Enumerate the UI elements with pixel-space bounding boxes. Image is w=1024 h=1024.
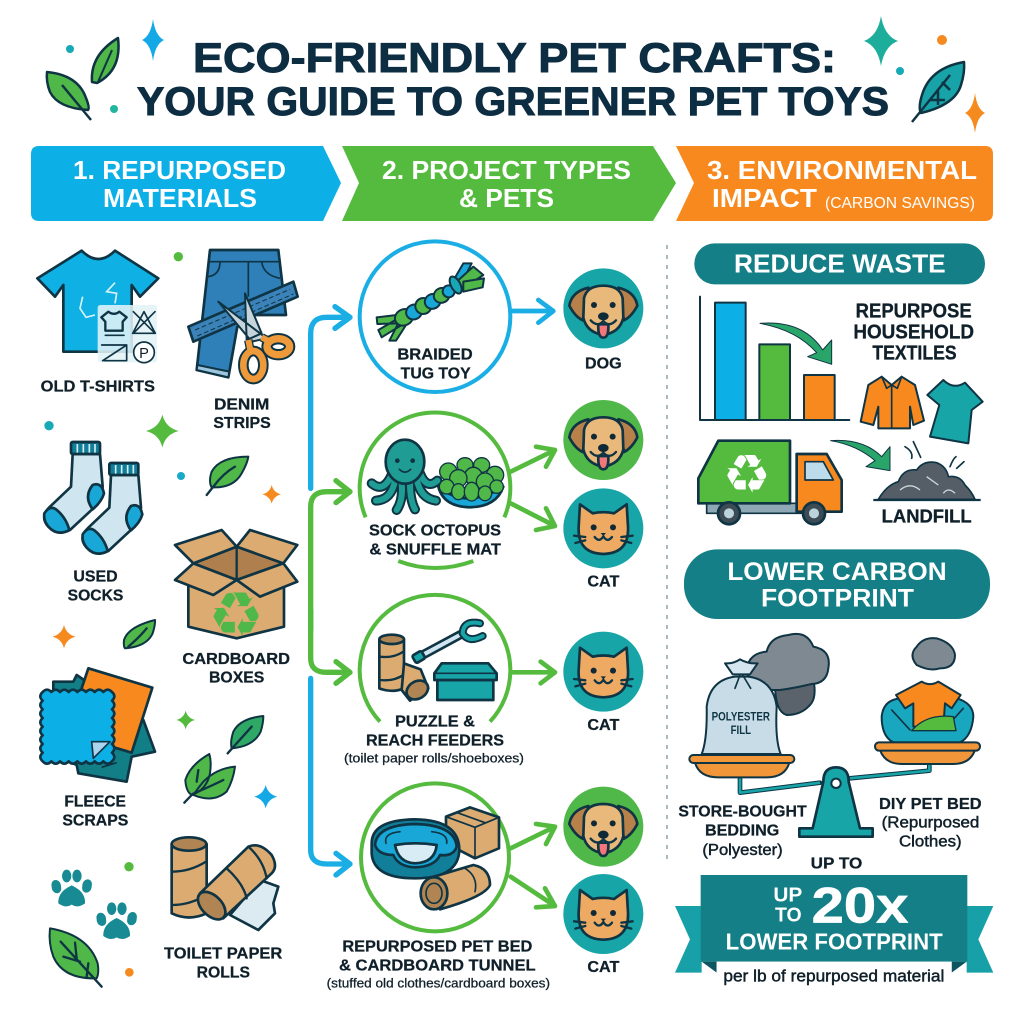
- icon: used socks: [44, 442, 142, 554]
- panel: braided tug toy: [360, 241, 510, 392]
- ribbon: 20x lower footprint: LOWER FOOTPRINT: [726, 928, 943, 954]
- label: repurpose household textiles: HOUSEHOLD: [853, 320, 974, 343]
- decorations: upper column 1: [44, 252, 281, 504]
- icon: old t-shirt: P: [139, 346, 149, 362]
- label: cardboard boxes: BOXES: [209, 669, 265, 686]
- label: repurpose household textiles: [853, 299, 974, 364]
- label: toilet paper rolls: [164, 946, 283, 981]
- icon: polyester fill bag on pan: FILL: [731, 723, 751, 737]
- banner 1: repurposed materials: 1. REPURPOSED: [73, 155, 286, 185]
- label: repurposed pet bed and cardboard tunnel: [327, 939, 550, 990]
- label: repurposed pet bed and cardboard tunnel: & CARDBOARD TUNNEL: [339, 958, 536, 975]
- heading: lower carbon footprint: [684, 549, 990, 619]
- icon: cat on teal: [563, 488, 643, 568]
- panel: sock octopus and snuffle mat: & SNUFFLE MAT: [369, 541, 501, 558]
- icon: cardboard box: ♻: [208, 579, 264, 651]
- icon: toilet paper rolls: [172, 837, 278, 930]
- ribbon: 20x lower footprint: 20x: [812, 878, 909, 934]
- label: repurposed pet bed and cardboard tunnel: (stuffed old clothes/cardboard boxes): [327, 976, 550, 990]
- panel: puzzle and reach feeders: (toilet paper rolls/shoeboxes): [344, 751, 524, 765]
- banner 3: environmental impact: (CARBON SAVINGS): [825, 195, 975, 212]
- icon: polyester fill bag on pan: POLYESTER: [712, 710, 770, 724]
- column 2: project types, upper: [311, 241, 643, 630]
- label: up to: UP TO: [811, 855, 862, 872]
- icon: old t-shirt: [37, 251, 158, 363]
- label: landfill: LANDFILL: [882, 506, 972, 527]
- icon: orange jacket: [861, 377, 924, 428]
- label: cat: CAT: [587, 717, 620, 734]
- ribbon: 20x lower footprint: [675, 875, 993, 987]
- icon: polyester cloud: [747, 634, 829, 715]
- label: diy pet bed: (Repurposed: [882, 815, 979, 832]
- label: repurpose household textiles: TEXTILES: [872, 341, 957, 364]
- icon: teal shirt: [927, 380, 983, 443]
- arrow: braided toy to dog: [513, 300, 553, 323]
- panel: braided tug toy: TUG TOY: [401, 365, 471, 382]
- icon: dog on teal: [563, 268, 643, 348]
- icon: cat on teal: [563, 874, 643, 954]
- arrow: blue flow to pet bed: [311, 678, 350, 875]
- ribbon: 20x lower footprint: UP: [773, 885, 802, 907]
- label: cardboard boxes: CARDBOARD: [182, 651, 290, 668]
- section: lower carbon footprint: [675, 549, 993, 987]
- icon: dog on green: [563, 787, 643, 867]
- label: fleece scraps: [62, 794, 129, 830]
- label: dog: DOG: [585, 355, 622, 372]
- banner 2: project types and pets: [342, 146, 676, 221]
- column 1: materials, upper: [37, 250, 298, 651]
- label: denim strips: [213, 396, 271, 432]
- column 1: materials, lower: [40, 620, 290, 987]
- label: store-bought bedding: STORE-BOUGHT: [678, 804, 807, 821]
- label: diy pet bed: [879, 796, 982, 851]
- label: toilet paper rolls: TOILET PAPER: [164, 946, 283, 963]
- arrow: octopus to dog: [511, 447, 555, 472]
- icon: balance scale: [740, 765, 929, 837]
- label: denim strips: DENIM: [214, 396, 269, 413]
- icon: recycling truck: ♻: [723, 443, 771, 506]
- icon: landfill: [873, 442, 981, 500]
- banner 3: environmental impact: IMPACT: [712, 183, 817, 213]
- heading: reduce waste: [694, 243, 985, 284]
- banner 2: project types and pets: 2. PROJECT TYPES: [382, 155, 631, 185]
- section: reduce waste: [694, 243, 985, 527]
- label: fleece scraps: FLEECE: [64, 794, 126, 811]
- panel: sock octopus and snuffle mat: [360, 413, 510, 568]
- title: YOUR GUIDE TO GREENER PET TOYS: [137, 80, 889, 124]
- label: denim strips: STRIPS: [213, 415, 271, 432]
- label: diy pet bed: DIY PET BED: [879, 796, 982, 813]
- icon: cardboard box: [175, 530, 297, 651]
- title decorations: right leaf and sparkles: [864, 16, 985, 133]
- panel: puzzle and reach feeders: [344, 595, 524, 765]
- arrow: truck to landfill: [831, 440, 890, 471]
- heading: reduce waste: REDUCE WASTE: [734, 249, 946, 279]
- panel: puzzle and reach feeders: REACH FEEDERS: [366, 733, 504, 750]
- title decorations: left leaves and sparkles: [47, 19, 164, 120]
- arrow: pet bed to cat: [511, 877, 555, 907]
- arrow: green flow to sock octopus: [311, 481, 350, 630]
- icon: recycling truck: [698, 441, 842, 524]
- arrow: puzzle feeders to cat: [513, 662, 555, 683]
- label: store-bought bedding: [678, 804, 807, 859]
- label: diy pet bed: Clothes): [899, 834, 962, 851]
- icon: polyester fill bag on pan: [689, 659, 794, 777]
- label: repurpose household textiles: REPURPOSE: [856, 299, 972, 322]
- arrow: blue flow to braided toy: [311, 307, 350, 488]
- title: [137, 34, 889, 124]
- icon: small cloud: [912, 638, 955, 669]
- label: cat: CAT: [587, 959, 620, 976]
- label: store-bought bedding: (Polyester): [702, 842, 783, 859]
- panel: repurposed pet bed and cardboard tunnel: [361, 783, 509, 931]
- banner 1: repurposed materials: MATERIALS: [103, 183, 257, 213]
- label: used socks: USED: [73, 569, 118, 586]
- label: old t-shirts: OLD T-SHIRTS: [41, 379, 155, 396]
- label: toilet paper rolls: ROLLS: [197, 964, 250, 981]
- label: cat: CAT: [587, 574, 620, 591]
- heading: lower carbon footprint: FOOTPRINT: [761, 586, 914, 613]
- label: repurposed pet bed and cardboard tunnel: REPURPOSED PET BED: [342, 939, 532, 956]
- banner 3: environmental impact: 3. ENVIRONMENTAL: [707, 155, 977, 185]
- arrow: downward trend: [760, 323, 832, 364]
- banner 2: project types and pets: & PETS: [459, 183, 554, 213]
- arrow: pet bed to dog: [511, 824, 555, 848]
- icon: fleece scraps: [40, 668, 155, 782]
- ribbon: 20x lower footprint: per lb of repurposed material: [723, 967, 944, 986]
- label: store-bought bedding: BEDDING: [705, 823, 779, 840]
- column 2: project types, lower: [311, 595, 643, 990]
- panel: puzzle and reach feeders: PUZZLE &: [395, 714, 475, 731]
- label: used socks: SOCKS: [68, 588, 124, 605]
- banner 1: repurposed materials: [31, 146, 341, 221]
- icon: denim and scissors: [188, 250, 298, 379]
- arrow: green flow to puzzle feeders: [311, 610, 350, 683]
- label: fleece scraps: SCRAPS: [62, 813, 129, 830]
- icon: cat on teal: [563, 632, 643, 712]
- divider between sections 2 and 3: [666, 245, 668, 862]
- heading: lower carbon footprint: LOWER CARBON: [727, 559, 947, 586]
- panel: braided tug toy: BRAIDED: [397, 346, 473, 363]
- arrow: octopus to cat: [511, 503, 555, 530]
- ribbon: 20x lower footprint: TO: [775, 905, 802, 927]
- bar chart: [700, 297, 849, 420]
- panel: sock octopus and snuffle mat: SOCK OCTOPUS: [369, 523, 501, 540]
- label: cardboard boxes: [182, 651, 290, 686]
- label: used socks: [68, 569, 124, 605]
- icon: dog on green: [563, 400, 643, 480]
- banner 3: environmental impact: [676, 146, 993, 221]
- icon: diy pet bed on pan: [875, 682, 980, 764]
- title: ECO-FRIENDLY PET CRAFTS:: [193, 34, 836, 81]
- decorations: lower column 1 leaves, paws and sparkles: [50, 620, 277, 987]
